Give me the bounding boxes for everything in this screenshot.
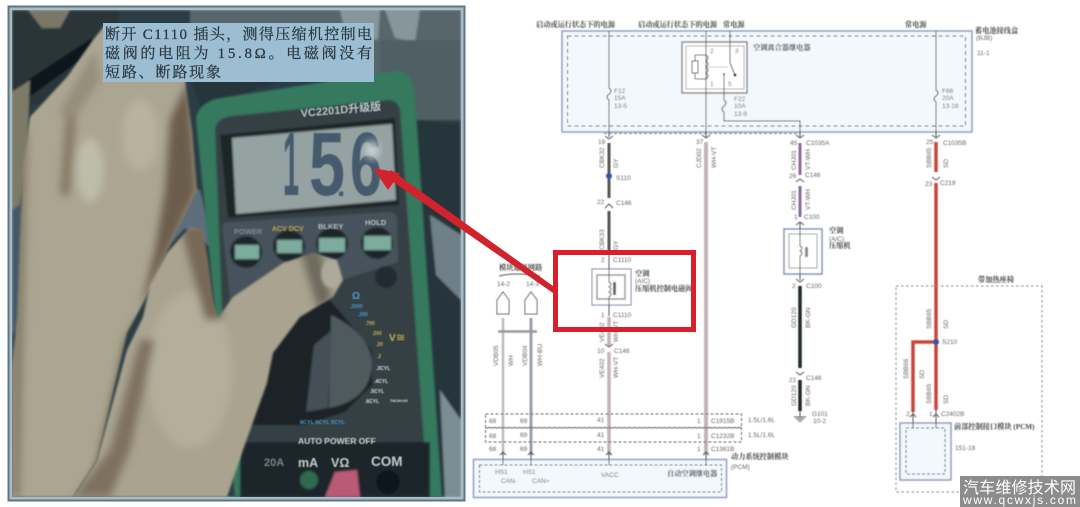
A/C clutch relay (682, 31, 811, 93)
panel: powertrain control module PCM: CAN+ (532, 478, 550, 485)
circuit: compressor clutch wire: 26 (789, 173, 797, 180)
panel: battery junction box BJB: 蓄电池接线盒 (975, 26, 1018, 35)
connector rows: 68 (489, 446, 497, 453)
network connectors: VDB04 (522, 345, 529, 366)
ground wire G101: G101 (812, 411, 828, 418)
circuit: compressor clutch wire: C146 (805, 172, 821, 179)
watermark: www.qcwxjs.com (962, 493, 1076, 507)
connector rows: 1.5L/1.6L (748, 417, 775, 424)
circuit: PCM solenoid wire: GY (613, 240, 620, 250)
circuit: red power wire F66: S210 (942, 339, 958, 346)
circuit: PCM solenoid wire: 1 (601, 312, 605, 319)
photo: multimeter resistance measurement (8, 6, 464, 500)
circuit: compressor clutch wire: 45 (790, 140, 798, 147)
ground wire G101: GD120 (791, 307, 798, 328)
circuit: compressor clutch wire: 13-9 (734, 111, 747, 118)
circuit: relay output wire (696, 31, 718, 455)
circuit: red power wire F66: F66 (942, 88, 954, 95)
circuit: PCM solenoid wire: 13-5 (614, 103, 627, 110)
circuit: compressor clutch wire: C100 (804, 214, 820, 221)
circuit: PCM solenoid wire: 18 (598, 139, 606, 146)
power source labels: 常电源 (723, 20, 745, 29)
icon: right thumb and hand (70, 220, 360, 500)
ground wire G101: BK-GN (805, 307, 812, 328)
icon: A/C compressor (784, 222, 851, 280)
circuit: PCM solenoid wire: C1110 (613, 257, 632, 264)
connector rows: C1381B (711, 446, 734, 453)
panel: powertrain control module PCM: VACC (601, 472, 619, 479)
circuit: compressor clutch wire: 1 (794, 214, 798, 221)
panel: front control interface module: 151-18 (955, 445, 976, 452)
circuit: compressor clutch wire: CHJ01 (791, 190, 798, 210)
circuit: red power wire F66: C219 (940, 180, 956, 187)
ground wire G101: 21 (789, 377, 797, 384)
connector rows: 1 (697, 433, 701, 440)
A/C clutch relay: 2 (710, 48, 714, 55)
ground wire G101: 2 (792, 283, 796, 290)
circuit: PCM solenoid wire: 2 (601, 257, 605, 264)
panel: battery junction box BJB: (BJB) (976, 35, 992, 42)
ground wire G101: C100 (806, 283, 822, 290)
multimeter markings: VC2201D升级版 (300, 99, 382, 120)
circuit: red power wire F66: SBB65 (926, 383, 933, 404)
panel: powertrain control module PCM: (PCM) (731, 464, 750, 471)
multimeter reading 15.8 (284, 132, 380, 196)
power source labels: 常电源 (905, 20, 927, 29)
network connectors: WH-BU (537, 344, 544, 366)
panel: heated seat option box (896, 275, 1042, 492)
circuit: PCM solenoid wire (597, 31, 632, 455)
multimeter markings: 20A (264, 457, 284, 469)
callout: measurement note: 短路、断路现象 (105, 64, 221, 81)
power source labels: 启动或运行状态下的电源 (638, 20, 718, 29)
wiring diagram (474, 20, 1042, 498)
icon: A/C compressor: 空调 (829, 226, 843, 235)
icon: multimeter body (196, 71, 442, 497)
circuit: PCM solenoid wire: WH-VT (613, 357, 620, 378)
circuit: red power wire F66: SD (919, 370, 926, 379)
watermark (960, 476, 1080, 507)
circuit: compressor clutch wire (722, 73, 830, 225)
circuit: red power wire F66: SD (943, 395, 950, 404)
circuit: PCM solenoid wire: C146 (616, 200, 632, 207)
network connectors: WH (508, 355, 515, 366)
network connectors (493, 263, 544, 455)
multimeter markings: .6CYL (365, 399, 379, 405)
circuit: red power wire F66: SBB66 (903, 358, 910, 379)
multimeter markings: POWER (234, 227, 263, 236)
network connectors: VDB05 (493, 345, 500, 366)
panel: powertrain control module PCM: HS1 (495, 469, 508, 476)
circuit: red power wire F66: 20A (942, 95, 954, 102)
panel: battery junction box BJB (562, 26, 1018, 134)
circuit: PCM solenoid wire: 10 (597, 348, 605, 355)
A/C clutch relay: 3 (735, 48, 739, 55)
panel: battery junction box BJB: 11-1 (977, 50, 990, 57)
ground wire G101: BK-GN (805, 385, 812, 406)
connector rows: 68 (489, 418, 497, 425)
circuit: PCM solenoid wire: 22 (597, 199, 605, 206)
A/C clutch relay: 5 (728, 81, 732, 88)
icon: solenoid valve symbol: 压缩机控制电磁阀 (635, 284, 693, 293)
connector rows: 41 (597, 417, 605, 424)
circuit: red power wire F66: 23 (925, 181, 933, 188)
circuit: PCM solenoid wire: C146 (614, 348, 630, 355)
circuit: PCM solenoid wire: S110 (616, 175, 631, 182)
multimeter markings: .200 (372, 331, 382, 337)
panel: powertrain control module PCM: CAN- (501, 478, 517, 485)
multimeter markings: .5CYL (370, 389, 384, 395)
connector rows: 1 (697, 418, 701, 425)
power source labels: 启动或运行状态下的电源 (536, 20, 616, 29)
circuit: compressor clutch wire: C1035A (806, 140, 830, 147)
panel: front control interface module: 2 (906, 411, 910, 418)
multimeter markings: .700 (365, 321, 375, 327)
circuit: red power wire F66 (903, 31, 966, 412)
circuit: compressor clutch wire: VT-WH (805, 189, 812, 210)
multimeter reading 15.8: . (337, 170, 345, 203)
multimeter reading 15.8: 5 (309, 115, 345, 215)
circuit: PCM solenoid wire: CBK33 (599, 229, 606, 250)
panel: powertrain control module PCM: 自动空调继电器 (667, 469, 718, 478)
circuit: compressor clutch wire: VT-WH (805, 149, 812, 170)
circuit: compressor clutch wire: CHJ01 (791, 150, 798, 170)
circuit: PCM solenoid wire: F12 (614, 88, 626, 95)
multimeter markings: AUTO POWER OFF (298, 436, 376, 446)
power source labels (536, 20, 927, 29)
callout: red highlight box around solenoid (556, 252, 694, 330)
multimeter reading 15.8: 1 (283, 115, 299, 215)
callout: measurement note: 断开 C1110 插头，测得压缩机控制电 (105, 25, 372, 43)
circuit: PCM solenoid wire: VE402 (599, 358, 606, 378)
callout: measurement note: 磁阀的电阻为 15.8Ω。电磁阀没有 (105, 44, 372, 62)
watermark: 汽车维修技术网 (963, 479, 1076, 497)
connector rows: 69 (520, 446, 528, 453)
callout: measurement note (103, 23, 374, 82)
multimeter markings: .2 (377, 354, 381, 360)
panel: front control interface module: 1 (929, 411, 933, 418)
connector rows: 41 (597, 446, 605, 453)
multimeter markings: .4CYL (374, 379, 388, 385)
multimeter markings (234, 99, 408, 470)
connector rows (486, 414, 775, 453)
ground wire G101: GD120 (791, 385, 798, 406)
multimeter markings: V≅ (389, 333, 406, 344)
circuit: PCM solenoid wire: WH-VT (613, 321, 620, 342)
circuit: relay output wire: WH-VT (711, 147, 718, 168)
multimeter markings: VΩ (331, 456, 349, 470)
multimeter markings: COM (371, 454, 402, 469)
connector rows: 69 (520, 418, 528, 425)
circuit: PCM solenoid wire: CBK32 (599, 147, 606, 168)
icon: A/C compressor: (A/C) (829, 236, 844, 243)
circuit: red power wire F66: SD (943, 159, 950, 168)
panel: front control interface module: C2402B (941, 411, 964, 418)
multimeter markings: .2000 (350, 304, 363, 310)
multimeter reading 15.8: 6 (350, 115, 382, 215)
circuit: PCM solenoid wire: C1110 (613, 312, 632, 319)
circuit: red power wire F66: 25 (926, 139, 934, 146)
circuit: relay output wire: CJD02 (696, 148, 703, 168)
circuit: red power wire F66: SD (943, 320, 950, 329)
panel: front control interface module (900, 410, 1035, 480)
multimeter markings: Ω (352, 291, 360, 302)
circuit: compressor clutch wire: F22 (734, 96, 746, 103)
network connectors: 模块通讯网路 (499, 263, 543, 272)
panel: powertrain control module PCM: 动力系统控制模块 (731, 452, 789, 461)
multimeter markings: BLKEY (318, 222, 343, 231)
panel: front control interface module: 前部控制接口模块 (PCM) (954, 422, 1035, 431)
connector rows: 1 (697, 446, 701, 453)
connector rows: 68 (489, 433, 497, 440)
circuit: PCM solenoid wire: VE402 (599, 322, 606, 342)
multimeter markings: HOLD (365, 218, 387, 227)
circuit: relay output wire: 37 (696, 139, 704, 146)
connector rows: C1915B (711, 418, 734, 425)
panel: powertrain control module PCM: HS1 (523, 469, 536, 476)
circuit: red power wire F66: SBB65 (926, 147, 933, 168)
connector rows: 69 (520, 432, 528, 439)
icon: A/C compressor: 压缩机 (829, 241, 851, 250)
circuit: red power wire F66: 13-16 (942, 103, 959, 110)
ground wire G101: 10-2 (813, 418, 826, 425)
circuit: red power wire F66: SBB65 (926, 308, 933, 329)
circuit: PCM solenoid wire: 15A (614, 95, 626, 102)
multimeter markings: mA (298, 456, 318, 470)
multimeter markings: .20 (376, 342, 383, 348)
ground wire G101 (789, 279, 828, 425)
icon: solenoid valve symbol: (A/C) (635, 278, 650, 285)
A/C clutch relay: 空调离合器继电器 (753, 43, 811, 52)
multimeter markings: 8CYL 6CYL 5CYL (300, 420, 346, 426)
circuit: compressor clutch wire: 10A (734, 103, 746, 110)
multimeter markings: ACV DCV (272, 226, 304, 233)
connector rows: C1232B (711, 433, 734, 440)
panel: powertrain control module PCM (474, 452, 789, 498)
panel: heated seat option box: 带加热座椅 (977, 275, 1015, 284)
network connectors: 14-3 (526, 281, 539, 288)
circuit: red power wire F66: C1035B (943, 140, 966, 147)
icon: solenoid valve symbol: 空调 (635, 269, 649, 278)
connector rows: 41 (597, 432, 605, 439)
arrow: from solenoid to multimeter reading (373, 168, 553, 293)
multimeter markings: .200 (358, 312, 368, 318)
icon: back of left hand (12, 20, 202, 500)
multimeter markings: .3CYL (376, 366, 390, 372)
multimeter markings: TACH×10 (390, 398, 408, 403)
icon: solenoid valve symbol (592, 262, 693, 312)
circuit: PCM solenoid wire: GY (613, 158, 620, 168)
network connectors: 14-2 (497, 281, 510, 288)
connector rows: 1.5L/1.6L (748, 432, 775, 439)
A/C clutch relay: 1 (710, 81, 714, 88)
ground wire G101: C146 (806, 375, 822, 382)
